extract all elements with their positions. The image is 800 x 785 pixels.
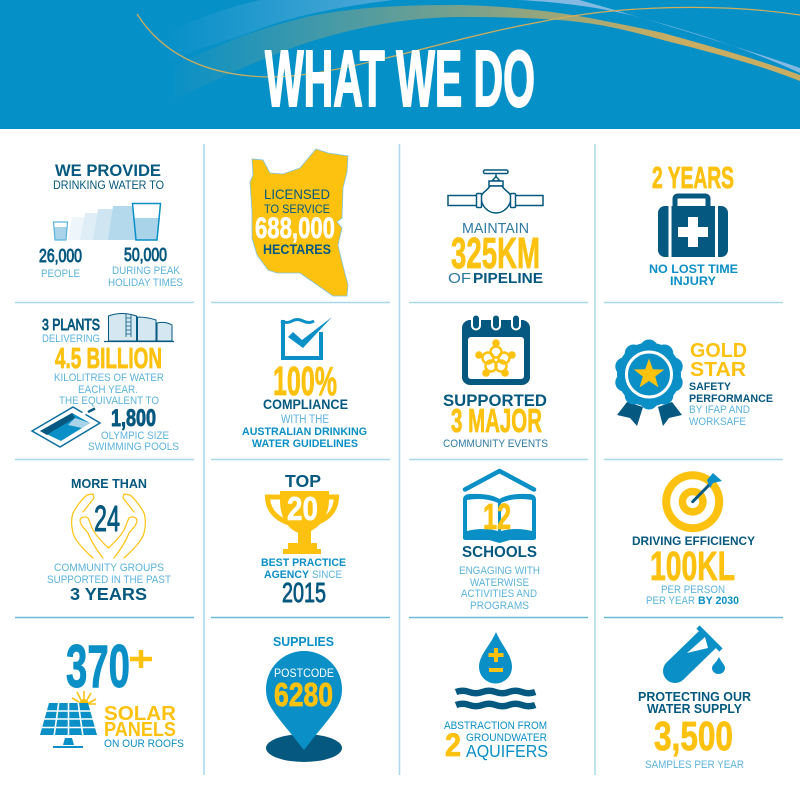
heading: we provide: WE PROVIDE [55,162,161,180]
text: of pipeline: OF [448,270,471,287]
text: olympic size swimming pools [88,430,179,453]
text: safety performance: SAFETY [689,381,732,393]
text: solar panels [104,702,176,741]
icon: calendar [462,314,530,385]
text: best practice agency since: SINCE [312,569,342,581]
icon: pipe valve [448,170,543,213]
icon: water tanks [104,314,174,342]
grid lines [15,144,783,775]
text: driving efficiency: DRIVING EFFICIENCY [632,534,755,548]
icon: solar panel [40,703,97,748]
text: samples per year: SAMPLES PER YEAR [645,759,744,771]
number: 2015: 2015 [282,577,326,608]
icon: checkbox [281,317,332,358]
text: no lost time injury [649,262,738,288]
panel: schools [459,471,540,612]
panel: postcode [266,635,342,762]
number: 24: 24 [94,498,120,539]
number: 100%: 100% [273,358,337,404]
text: best practice agency since: AGENCY [264,569,310,581]
text: licensed to service: LICENSED [264,186,330,202]
number: 12: 12 [483,496,511,537]
text: gold star [690,340,747,381]
icon: water drop with plus minus [479,632,512,684]
map shape [250,149,348,296]
panel: gold star [615,340,773,428]
text: 3 years: 3 YEARS [70,584,147,604]
icon: test tube and drop [663,627,725,683]
text: community groups: SUPPORTED IN THE PAST [47,574,171,586]
text: safety performance [689,381,773,405]
text: supplies: SUPPLIES [273,635,334,649]
icon: growing water glasses [54,204,160,240]
panel: community groups [47,477,171,604]
text: drinking water guidelines: AUSTRALIAN DRINKING [242,426,367,438]
heading: top: TOP [285,471,321,491]
text: gold star: STAR [690,359,747,381]
number: 2: 2 [445,727,461,763]
icon: target with arrow [662,471,723,532]
text: kilolitres description: EACH YEAR. [78,384,138,396]
text: kilolitres description: KILOLITRES OF WATER [54,372,164,384]
panel: compliance [242,317,367,450]
label: during peak holiday times [108,265,183,289]
text: protecting our water supply: PROTECTING OUR [638,690,751,704]
text: licensed to service: TO SERVICE [264,202,330,216]
number: 325km: 325KM [451,229,540,278]
text: gold star: GOLD [690,340,747,362]
text: by ifap and worksafe [689,404,750,428]
icon: trophy [268,491,336,554]
label: during peak holiday times: HOLIDAY TIMES [108,277,183,289]
number: 26,000: 26,000 [39,246,82,266]
text: no lost time injury: NO LOST TIME [649,262,738,276]
number: 50,000: 50,000 [124,245,167,265]
text: abstraction from groundwater: ABSTRACTION FROM [444,720,547,732]
icon: swimming pool [32,407,100,447]
text: kilolitres description [54,372,164,407]
number: 6280: 6280 [274,676,333,713]
number: 370: 370 [66,633,130,700]
panel: aquifers [444,632,548,763]
text: on our roofs: ON OUR ROOFS [104,738,184,750]
text: safety performance: PERFORMANCE [689,393,773,405]
text: of pipeline: PIPELINE [473,270,543,287]
panel: pipeline [448,170,543,287]
text: drinking water guidelines [242,426,367,450]
text: by ifap and worksafe: WORKSAFE [689,416,746,428]
number: 4.5 billion: 4.5 BILLION [55,343,162,375]
icon: plus [130,650,152,668]
text: per person per year by 2030 [646,584,739,607]
icon: cupped hands [72,494,146,558]
label: delivering: DELIVERING [42,333,100,345]
icon: sun [72,691,96,704]
text: community events: COMMUNITY EVENTS [443,438,548,450]
icon: ribbon badge [615,340,683,426]
panel: water samples [638,627,751,771]
panel: no lost time injury [649,160,738,288]
text: maintain: MAINTAIN [462,220,529,237]
text: solar panels: SOLAR [104,702,176,725]
text: postcode: POSTCODE [274,668,334,680]
header banner [0,0,800,129]
subheading: drinking water to: DRINKING WATER TO [53,178,164,192]
heading: more than: MORE THAN [71,477,147,491]
text: per person per year by 2030: BY 2030 [698,595,739,607]
text: no lost time injury: INJURY [670,274,716,288]
text: supported: SUPPORTED [443,392,547,410]
panel: driving efficiency [632,471,755,607]
text: schools: SCHOOLS [462,544,537,561]
text: engaging description [459,565,540,612]
number: 688,000: 688,000 [255,212,335,245]
icon: map pin [266,651,342,762]
number: 20: 20 [287,490,318,527]
text: aquifers: AQUIFERS [466,741,548,761]
number: 1,800: 1,800 [111,405,156,432]
icon: linked community star [475,339,516,377]
label: during peak holiday times: DURING PEAK [112,265,181,277]
text: community groups [47,562,171,586]
text: engaging description: ACTIVITIES AND [461,588,537,600]
label: people: PEOPLE [41,268,80,280]
title: WHAT WE DO [265,34,535,123]
text: per person per year by 2030: PER YEAR [646,595,695,607]
text: best practice agency since: BEST PRACTICE [261,557,346,569]
icon: waves [456,691,535,706]
panel: drinking water [39,162,183,289]
text: community groups: COMMUNITY GROUPS [54,562,164,574]
panel: top 20 [261,471,346,608]
text: licensed to service [264,186,330,216]
text: drinking water guidelines: WATER GUIDELINES [252,438,358,450]
text: per person per year by 2030: PER PERSON [661,584,725,596]
number: 3 major: 3 MAJOR [451,402,542,439]
text: olympic size swimming pools: SWIMMING POOLS [88,441,179,453]
panel: plants [32,314,179,453]
text: engaging description: WATERWISE [470,577,529,589]
text: compliance: COMPLIANCE [263,397,348,412]
text: engaging description: ENGAGING WITH [459,565,540,577]
text: with the: WITH THE [281,414,329,426]
heading: 3 plants: 3 PLANTS [42,317,100,334]
panel: community events [443,314,548,450]
text: abstraction from groundwater: GROUNDWATER [466,732,547,744]
text: hectares: HECTARES [263,242,331,257]
text: by ifap and worksafe: BY IFAP AND [689,404,750,416]
text: solar panels: PANELS [104,718,176,741]
icon: first aid kit [658,196,728,257]
text: abstraction from groundwater [444,720,547,744]
number: 100kl: 100KL [650,543,735,589]
text: protecting our water supply: WATER SUPPLY [647,702,743,716]
icon: book house [463,471,536,543]
text: kilolitres description: THE EQUIVALENT TO [59,395,159,407]
number: 3,500: 3,500 [654,713,733,759]
text: best practice agency since [261,557,346,581]
text: protecting our water supply [638,690,751,716]
panel: solar panels [40,633,184,750]
number: 2 years: 2 YEARS [652,160,734,195]
text: engaging description: PROGRAMS [470,600,529,612]
text: olympic size swimming pools: OLYMPIC SIZE [101,430,169,442]
panel: licensed area map [250,149,348,296]
